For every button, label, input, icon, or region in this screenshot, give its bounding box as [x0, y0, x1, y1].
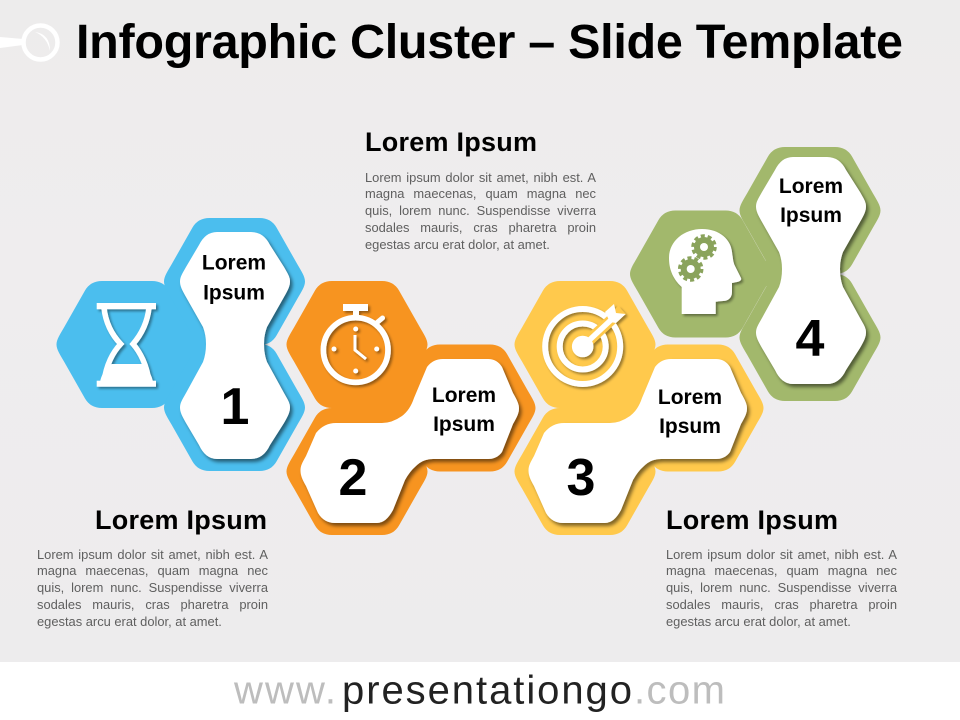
text block top: magna maecenas, quam magna nec	[365, 186, 596, 201]
text block left: sodales mauris, cras pharetra proin	[37, 597, 268, 612]
text block top: quis, lorem nunc. Suspendisse viverra	[365, 203, 596, 218]
footer url: www.	[233, 668, 336, 712]
label 1	[202, 252, 266, 304]
title: Infographic Cluster – Slide Template	[76, 15, 903, 69]
text block left	[37, 546, 268, 629]
text block right	[666, 546, 898, 629]
cluster 2: orange stopwatch	[286, 281, 536, 535]
white label shape 4	[756, 157, 866, 384]
label 2: Ipsum	[433, 413, 495, 436]
text block left: magna maecenas, quam magna nec	[37, 563, 268, 578]
number 4: 4	[796, 310, 825, 368]
label 3	[658, 386, 722, 438]
label 3: Ipsum	[659, 415, 721, 438]
orange hexagons	[286, 281, 536, 535]
label 1: Lorem	[202, 252, 266, 274]
number 1: 1	[221, 378, 249, 436]
heading right: Lorem Ipsum	[666, 505, 838, 535]
text block right: quis, lorem nunc. Suspendisse viverra	[666, 580, 897, 595]
icon: head with gears	[669, 229, 741, 314]
logo: ring with pointer	[0, 26, 58, 60]
cluster 1: blue hourglass	[56, 218, 305, 471]
label 1: Ipsum	[203, 282, 265, 304]
label 4: Lorem	[779, 175, 843, 198]
heading left: Lorem Ipsum	[95, 505, 267, 535]
text block left: quis, lorem nunc. Suspendisse viverra	[37, 580, 268, 595]
white label shape 1	[180, 232, 290, 459]
label 2: Lorem	[432, 384, 496, 407]
cluster 4: green head (drawn before yellow)	[630, 147, 880, 401]
text block left: egestas arcu erat dolor, at amet.	[37, 614, 222, 629]
text block top	[365, 170, 596, 252]
text block right: Lorem ipsum dolor sit amet, nibh est. A	[666, 546, 897, 562]
cluster 3: yellow target	[514, 281, 764, 535]
yellow hexagons	[514, 281, 764, 535]
footer url	[233, 668, 725, 712]
text block right: egestas arcu erat dolor, at amet.	[666, 614, 851, 629]
icon: stopwatch	[323, 304, 388, 382]
text block top: egestas arcu erat dolor, at amet.	[365, 237, 550, 252]
white label shape 3	[528, 359, 747, 523]
number 2: 2	[339, 449, 367, 507]
footer url: .com	[634, 668, 725, 712]
blue hexagons	[56, 218, 305, 471]
heading top: Lorem Ipsum	[365, 127, 537, 157]
icon: target with arrow	[545, 304, 626, 384]
text block top: Lorem ipsum dolor sit amet, nibh est. A	[365, 170, 596, 184]
label 3: Lorem	[658, 386, 722, 409]
label 4: Ipsum	[780, 204, 842, 227]
green hexagons	[630, 147, 880, 401]
text block right: sodales mauris, cras pharetra proin	[666, 597, 897, 612]
number 3: 3	[567, 449, 595, 507]
text block top: sodales mauris, cras pharetra proin	[365, 220, 596, 235]
icon: hourglass	[97, 303, 156, 387]
label 2	[432, 384, 496, 436]
footer url: presentationgo	[342, 668, 632, 712]
text block right: magna maecenas, quam magna nec	[666, 563, 897, 578]
text block left: Lorem ipsum dolor sit amet, nibh est. A	[37, 546, 268, 562]
label 4	[779, 175, 843, 227]
white label shape 2	[300, 359, 519, 523]
